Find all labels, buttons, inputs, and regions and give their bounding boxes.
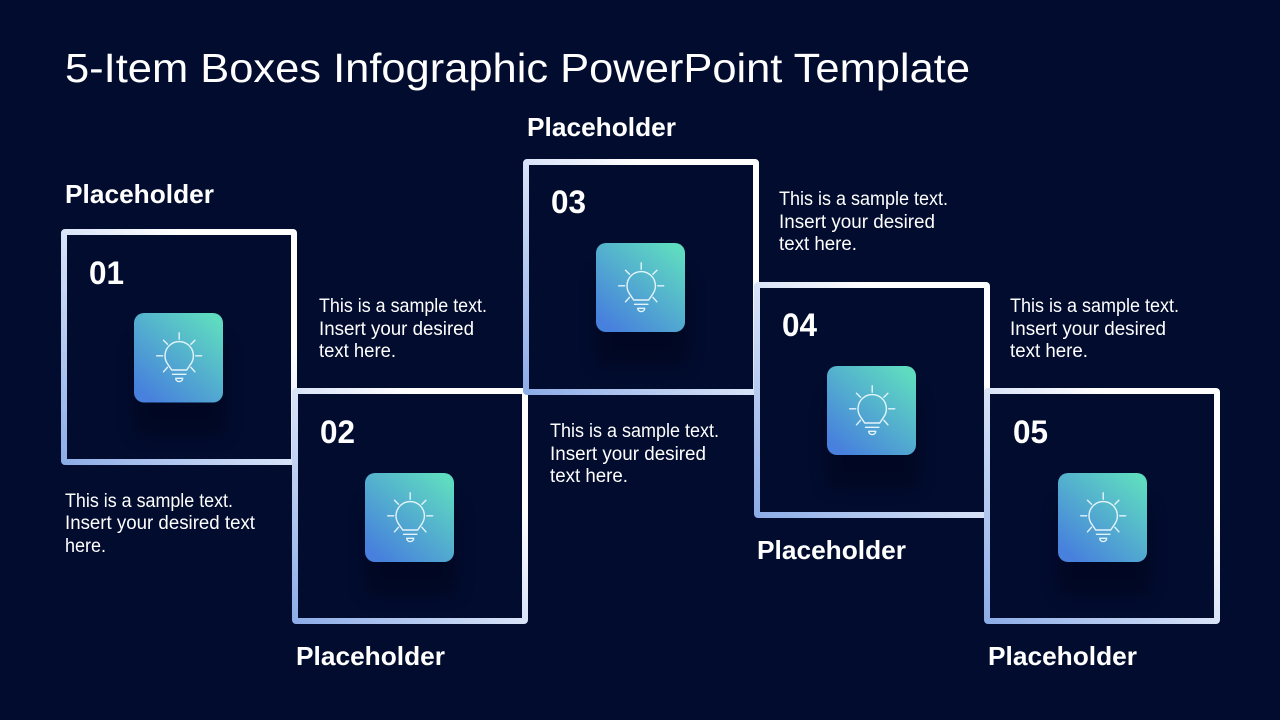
body text 05: Insert your desired	[1010, 319, 1166, 340]
body text 05: This is a sample text.	[1010, 296, 1179, 317]
heading 03: Placeholder	[527, 112, 676, 142]
number 01: 01	[89, 255, 124, 291]
heading 01: Placeholder	[65, 179, 214, 209]
icon 02: light bulb	[365, 473, 457, 595]
item 05	[987, 391, 1217, 621]
body text 05: text here.	[1010, 341, 1088, 362]
item 03	[526, 162, 756, 392]
body text 04: This is a sample text.	[779, 189, 948, 210]
heading 04: Placeholder	[757, 535, 906, 565]
item 01	[64, 232, 294, 462]
body text 03: text here.	[550, 466, 628, 487]
body text 02: This is a sample text.	[319, 296, 487, 317]
box 01 frame	[64, 232, 294, 462]
body text 03: This is a sample text.	[550, 421, 719, 442]
number 03: 03	[551, 184, 586, 220]
body text 02: text here.	[319, 341, 396, 362]
number 05: 05	[1013, 414, 1048, 450]
body text 04	[779, 189, 948, 255]
item 02	[295, 391, 525, 621]
icon 05: light bulb	[1058, 473, 1150, 595]
number 04: 04	[782, 307, 817, 343]
box 03 frame	[526, 162, 756, 392]
body text 03: Insert your desired	[550, 444, 706, 465]
body text 01	[65, 491, 256, 557]
icon 01: light bulb	[134, 313, 226, 435]
body text 02	[319, 296, 487, 362]
title: 5-Item Boxes Infographic PowerPoint Template	[65, 45, 970, 91]
box 05 frame	[987, 391, 1217, 621]
icon 03: light bulb	[596, 243, 688, 365]
body text 02: Insert your desired	[319, 319, 474, 340]
body text 05	[1010, 296, 1179, 362]
icon 04: light bulb	[827, 366, 919, 488]
number 02: 02	[320, 414, 355, 450]
heading 05: Placeholder	[988, 641, 1137, 671]
body text 01: This is a sample text.	[65, 491, 233, 512]
body text 01: Insert your desired text	[65, 513, 256, 534]
body text 03	[550, 421, 719, 487]
box 04 frame	[757, 285, 987, 515]
body text 04: text here.	[779, 234, 857, 255]
body text 01: here.	[65, 536, 106, 557]
heading 02: Placeholder	[296, 641, 445, 671]
body text 04: Insert your desired	[779, 212, 935, 233]
box 02 frame	[295, 391, 525, 621]
item 04	[757, 285, 987, 515]
